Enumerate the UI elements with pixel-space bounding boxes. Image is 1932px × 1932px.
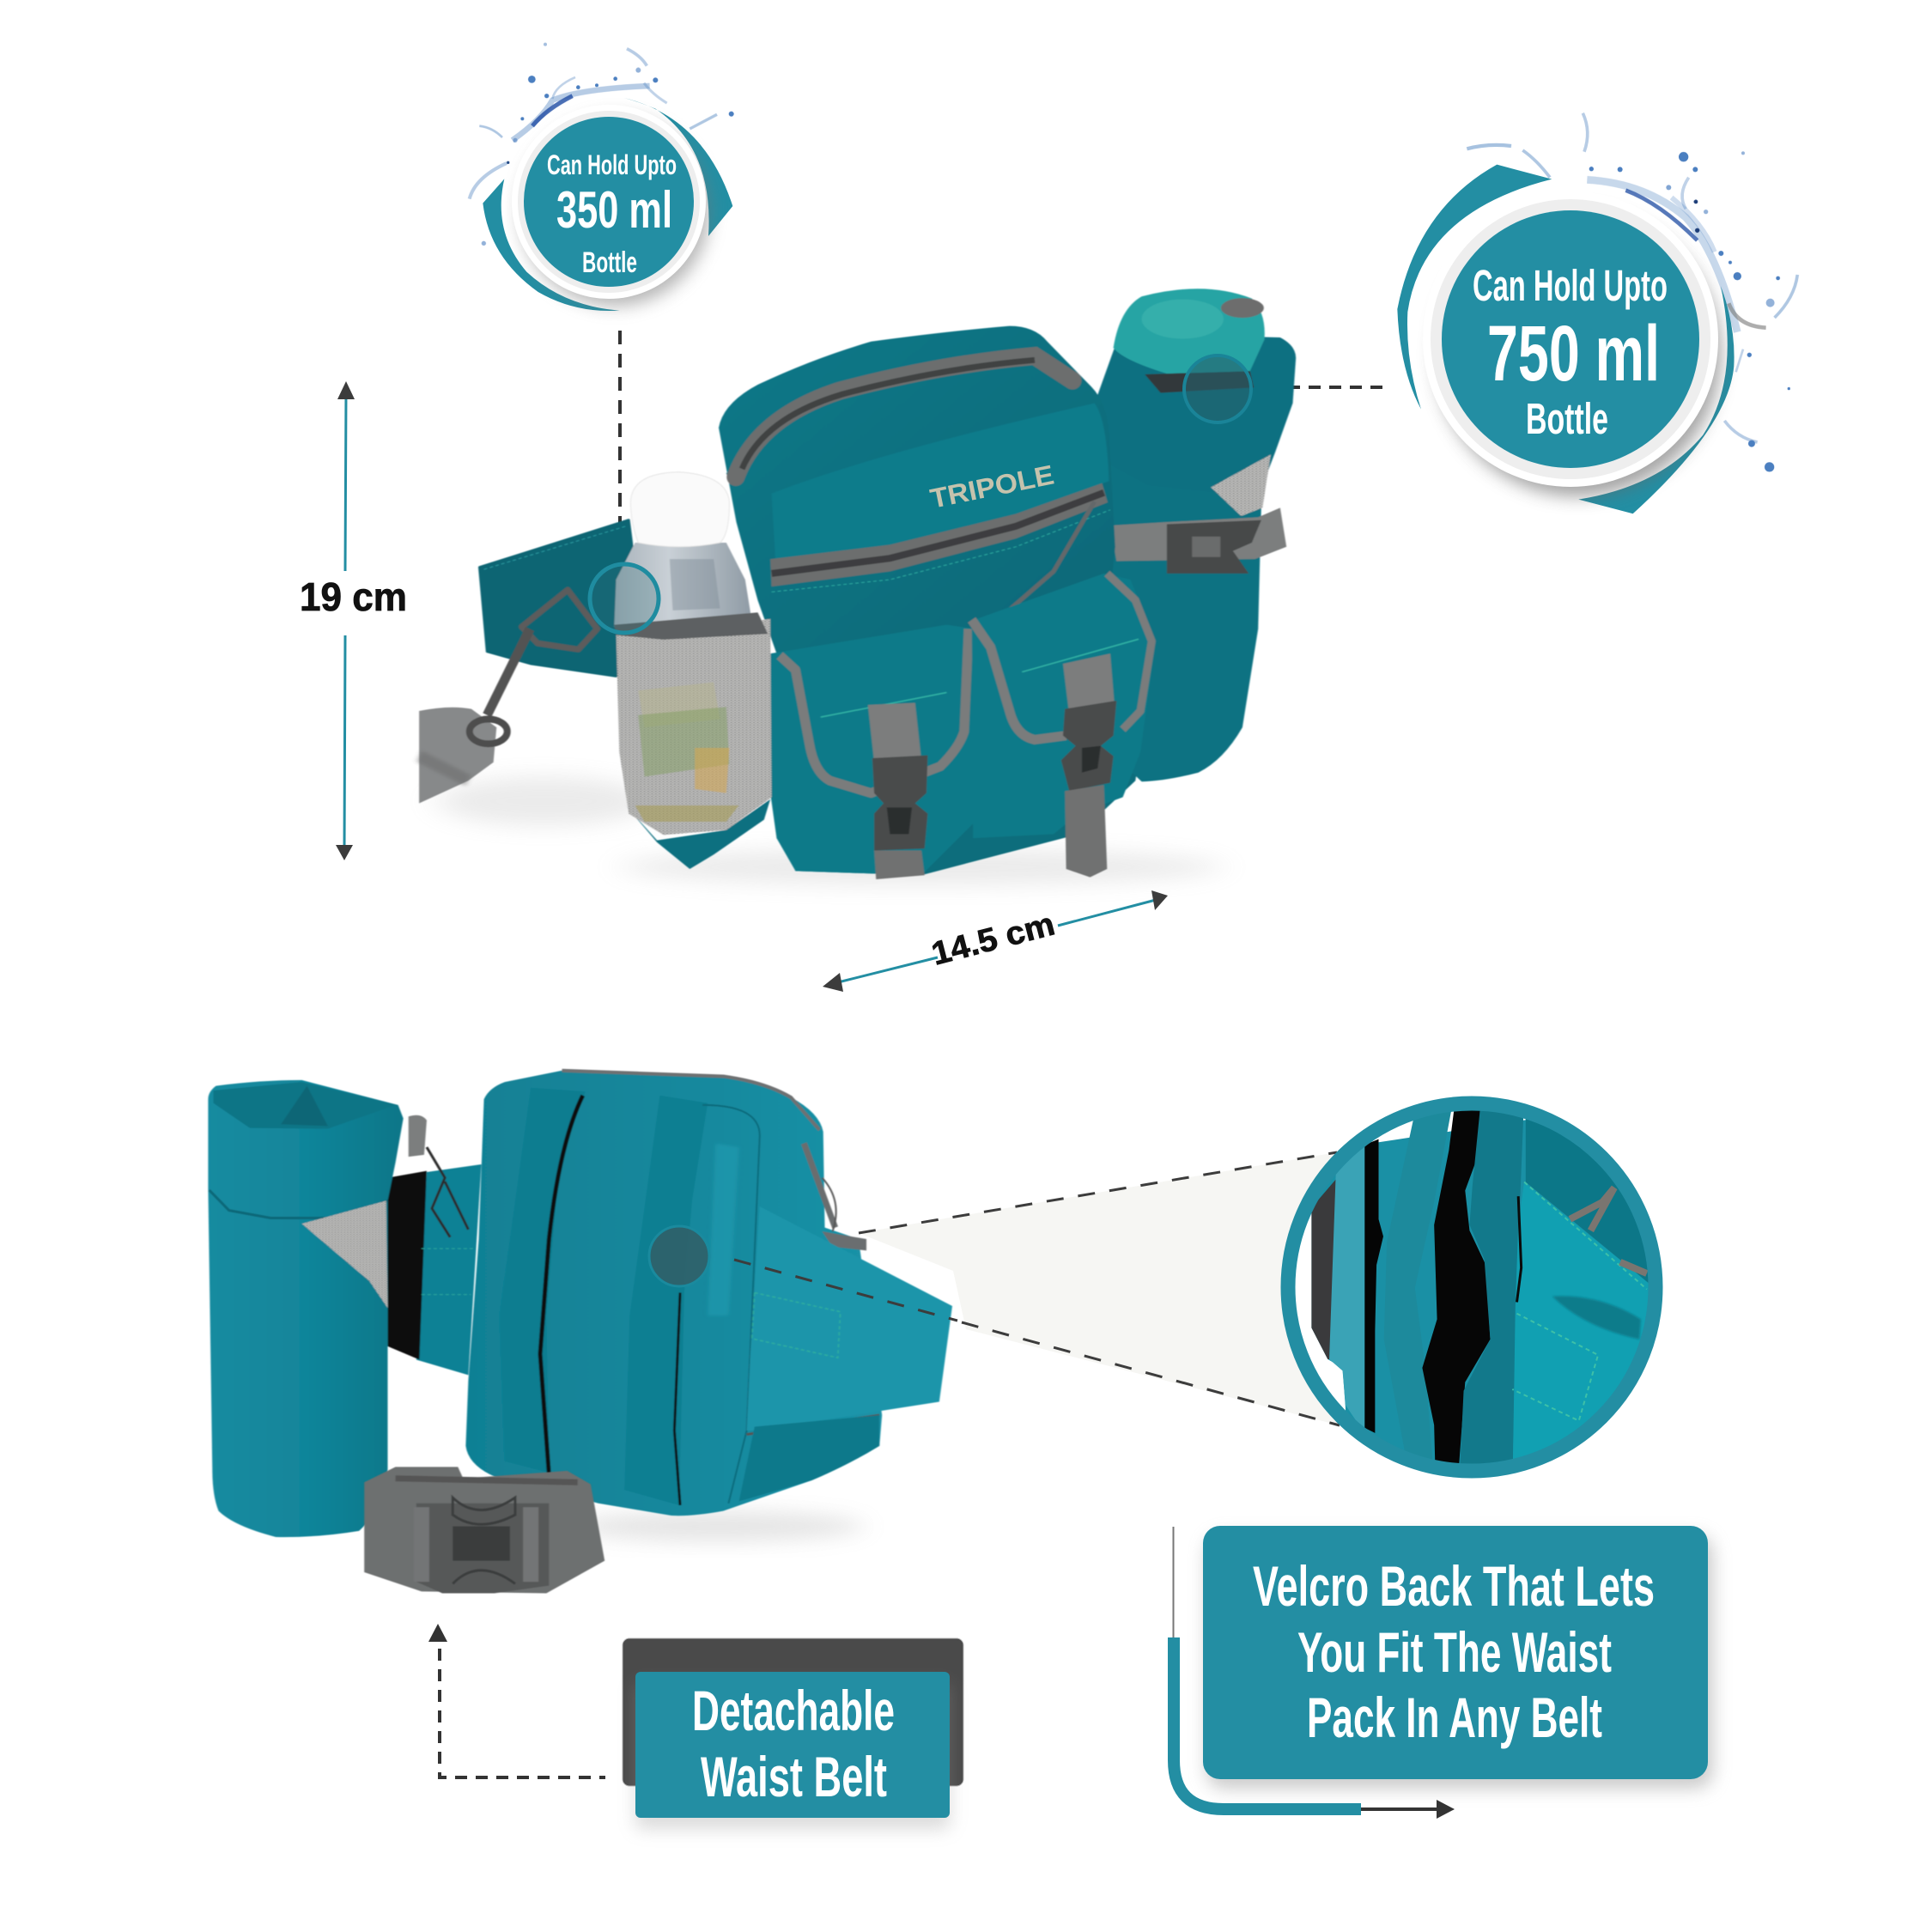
dashed leader: 750 ml badge to bottle (1267, 386, 1388, 389)
label: Velcro back: You Fit The Waist (1297, 1620, 1612, 1684)
side release strap and hook (419, 590, 598, 804)
rear bottle holder (1097, 289, 1296, 781)
magnified velcro detail circle (1287, 1097, 1682, 1497)
dashed projection lines (734, 1152, 1340, 1425)
front panel (772, 404, 1109, 560)
flap detail (1525, 1119, 1649, 1283)
water splash around 750 ml badge (1467, 113, 1797, 472)
label: Detachable Waist Belt: Waist Belt (701, 1745, 887, 1808)
ground shadow (573, 1511, 864, 1541)
teal bottle lid (1114, 289, 1265, 374)
callout: 350 ml bottle badge: Bottle (582, 246, 637, 279)
callout: 350 ml bottle badge (470, 43, 734, 311)
product photo: waist pack back with velcro (208, 1071, 952, 1594)
left strap and buckle (868, 702, 921, 762)
product photo: waist pack front (419, 289, 1296, 885)
callout: 750 ml bottle badge: 750 ml (1487, 310, 1660, 398)
label: Velcro back: Pack In Any Belt (1307, 1686, 1602, 1749)
mesh pocket (617, 618, 772, 835)
badge text: Can Hold Upto (1473, 261, 1668, 310)
mesh collar (614, 612, 768, 640)
main body (719, 326, 1115, 653)
highlight circle on velcro (649, 1226, 709, 1286)
dimension arrow: 14.5 cm width (823, 890, 1168, 992)
mesh panel (1211, 454, 1271, 516)
teal ring (1288, 1103, 1656, 1471)
top zipper (736, 356, 1072, 477)
label: Detachable Waist Belt: Detachable (692, 1679, 895, 1742)
vertical straps (500, 1088, 586, 1473)
brand logo: TRIPOLE (927, 459, 1056, 514)
detachable belt buckle (364, 1467, 605, 1594)
black gaps (1364, 1139, 1383, 1433)
badge disc (524, 117, 694, 287)
label: Velcro back (1203, 1526, 1713, 1789)
water bottle (614, 472, 772, 869)
belt behind pack (416, 1164, 482, 1375)
callout: 750 ml bottle badge: Bottle (1526, 394, 1608, 443)
pack base fill (726, 423, 1157, 875)
left belt wing (479, 520, 633, 676)
left front pocket (770, 625, 975, 879)
label: Detachable Waist Belt (623, 1638, 963, 1829)
dimension arrow: 19 cm height: 19 cm (300, 574, 407, 619)
label: Velcro back: Velcro Back That Lets (1253, 1554, 1655, 1618)
callout: 750 ml bottle badge (1397, 113, 1797, 513)
white ring (512, 105, 706, 299)
teal swoosh arcs (1397, 165, 1735, 513)
elbow arrow: velcro label (1173, 1527, 1455, 1819)
fabric panels (1311, 1120, 1649, 1463)
dimension arrow: 14.5 cm width: 14.5 cm (928, 906, 1059, 973)
dimension arrow: 19 cm height (300, 381, 407, 860)
badge text: Can Hold Upto (547, 149, 677, 180)
badge shadow (1436, 211, 1721, 496)
white ring (1423, 191, 1718, 487)
highlight circle on large bottle (1184, 355, 1251, 422)
middle zipper (770, 483, 1108, 586)
bottle pouch base (626, 799, 770, 869)
right strap and buckle (1063, 653, 1115, 715)
side strap and buckle (1110, 507, 1286, 562)
velcro flap (739, 1206, 952, 1502)
ground shadow (437, 776, 1224, 885)
top zipper edge (562, 1071, 819, 1130)
water splash around 350 ml badge (470, 43, 734, 246)
pack back panel (465, 1071, 882, 1516)
right front pocket (972, 574, 1156, 878)
teal swoosh arcs (483, 98, 732, 311)
callout: 350 ml bottle badge: 350 ml (556, 181, 672, 239)
dashed leader: 350 ml badge to bottle (618, 331, 622, 524)
dashed arrow: belt label to buckle (428, 1624, 605, 1777)
badge disc (1442, 210, 1699, 468)
highlight circle on small bottle (590, 564, 659, 633)
bottle holder (208, 1080, 468, 1537)
badge shadow (520, 117, 709, 306)
zoom projection cone (859, 1152, 1340, 1425)
